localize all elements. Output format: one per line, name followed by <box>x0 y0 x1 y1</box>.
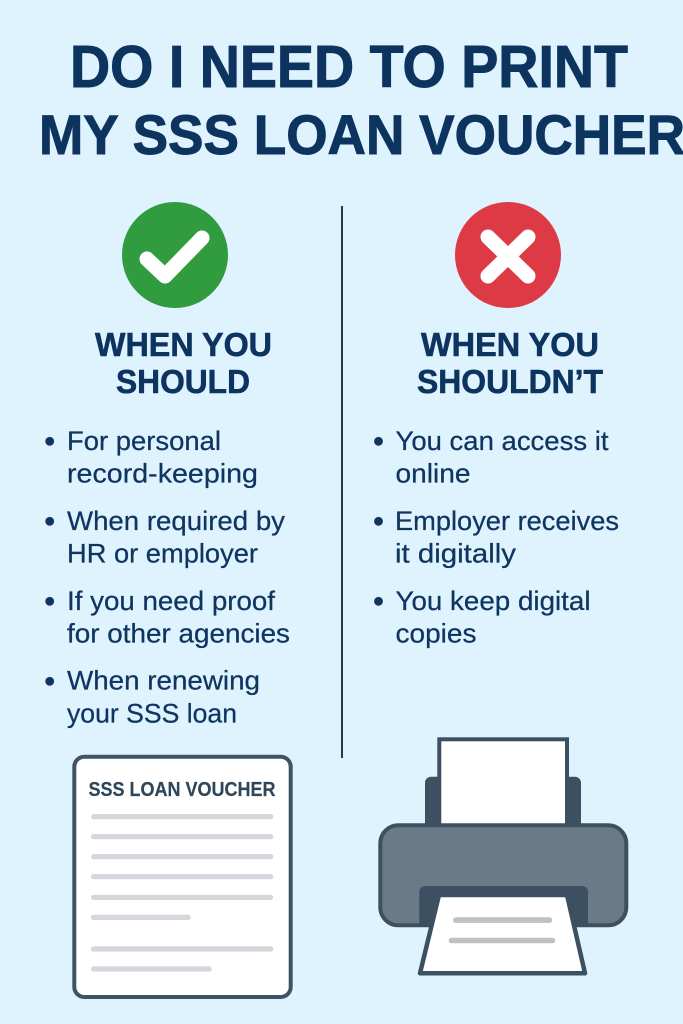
list item: renewing loan <box>45 665 260 728</box>
list item: access online: online <box>396 458 470 488</box>
list: should <box>45 426 290 728</box>
list item: renewing loan: When renewing <box>67 665 260 695</box>
list item: required by HR <box>45 506 286 568</box>
voucher heading: SSS LOAN VOUCHER <box>88 779 276 801</box>
heading: when you should: WHEN YOU <box>95 326 272 363</box>
icon: red cross <box>455 202 561 308</box>
voucher document <box>74 757 291 997</box>
heading: when you shouldn't: SHOULDN’T <box>417 363 603 400</box>
list item: access online <box>374 426 609 488</box>
list item: required by HR: When required by <box>67 506 286 536</box>
heading: when you should: SHOULD <box>116 363 250 400</box>
heading: when you should <box>95 326 272 400</box>
title: DO I NEED TO PRINT <box>70 34 628 100</box>
icon: printer <box>380 739 626 973</box>
list item: digital copies: copies <box>396 618 476 648</box>
list item: personal record-keeping <box>45 426 258 488</box>
list item: employer digital <box>374 506 619 568</box>
list item: digital copies: You keep digital <box>396 586 590 616</box>
divider line <box>341 206 343 758</box>
list item: proof for agencies: for other agencies <box>67 618 290 648</box>
list item: proof for agencies: If you need proof <box>67 586 276 616</box>
list item: personal record-keeping: record-keeping <box>67 458 258 488</box>
list item: employer digital: Employer receives <box>395 506 619 536</box>
title <box>39 34 683 166</box>
list item: digital copies <box>374 586 590 648</box>
heading: when you shouldn't <box>417 326 603 400</box>
list item: required by HR: HR or employer <box>67 538 258 568</box>
list item: proof for agencies <box>45 586 290 648</box>
list item: access online: You can access it <box>396 426 609 456</box>
list item: personal record-keeping: For personal <box>67 426 221 456</box>
heading: when you shouldn't: WHEN YOU <box>421 326 599 363</box>
list item: renewing loan: your SSS loan <box>67 698 237 728</box>
list: shouldn't <box>374 426 619 648</box>
list item: employer digital: it digitally <box>395 538 517 568</box>
icon: green check <box>122 202 228 308</box>
